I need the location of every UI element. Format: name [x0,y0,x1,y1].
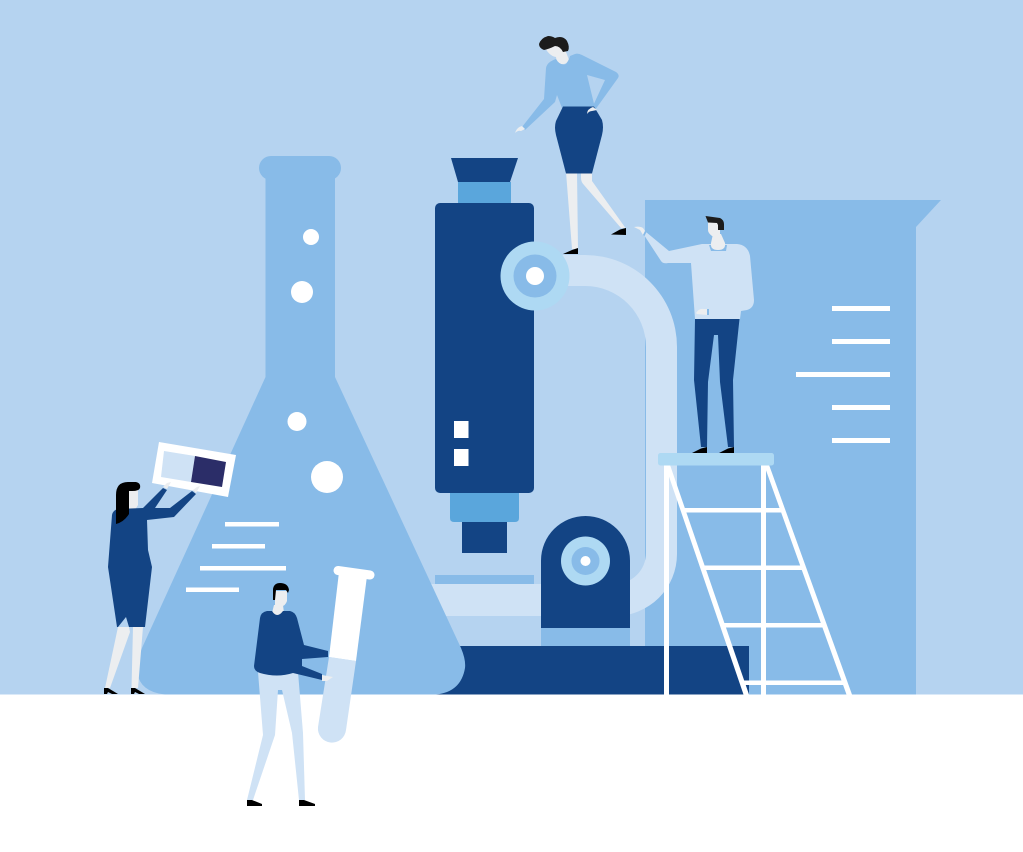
flask body [137,170,465,694]
microscope arm [430,255,677,616]
tube glass [329,572,367,661]
tube indicator squares [454,421,468,466]
shoes [247,800,262,806]
figure: man holding test tube [247,570,370,806]
waist hand [696,309,707,315]
neck [711,234,725,250]
beaker [645,200,941,694]
eyepiece collar [458,182,511,204]
microscope tube [435,203,534,493]
sweater [254,611,328,680]
waist cuff [707,309,709,315]
pointing hand [634,227,645,235]
figure: woman on microscope [515,36,626,254]
focus knob small [561,536,610,586]
shoes [104,688,118,694]
objective lens [450,490,519,522]
tube rim [338,570,370,575]
objective tip [462,522,507,553]
hair [116,482,140,524]
microscope base [435,646,749,694]
head and neck [544,40,569,64]
beaker body [645,200,941,694]
shoes [692,447,707,453]
flask rim [259,156,341,180]
hip hand [587,107,597,114]
stage strip [435,575,534,584]
hair [706,216,724,230]
hands [163,482,200,493]
trousers [694,319,740,447]
hands [515,126,525,133]
trousers [247,672,305,800]
stepladder [658,453,852,694]
dress [108,488,196,627]
hair [273,583,289,600]
face [128,490,138,510]
neck [272,605,284,616]
conical flask [137,156,465,694]
figure: woman holding card [104,442,236,694]
card frame [152,442,236,497]
legs [566,172,578,249]
legs [105,627,130,688]
flask bubbles [288,229,343,493]
eyepiece top [451,158,518,182]
beaker scale marks [796,306,890,443]
pointing cuff [643,231,646,236]
tube liquid [318,657,356,743]
sweater [522,54,619,130]
microscope [430,158,749,694]
card light swatch [161,451,195,482]
face [708,222,720,237]
ladder platform [658,453,774,466]
hair [539,36,569,52]
test tube [318,570,370,743]
figure: man on ladder [634,216,754,453]
flask level marks [186,522,286,592]
focus knob large [500,242,570,310]
foot plinth [541,628,630,646]
skirt [555,106,603,174]
face [275,591,287,606]
foot dome [541,516,630,628]
color sample card [152,442,236,497]
card dark swatch [191,456,226,487]
collar [709,245,727,251]
ladder frame [664,462,852,694]
sweater [644,232,754,319]
microscope foot [541,516,630,646]
hand [322,675,333,681]
shoes [563,248,578,254]
